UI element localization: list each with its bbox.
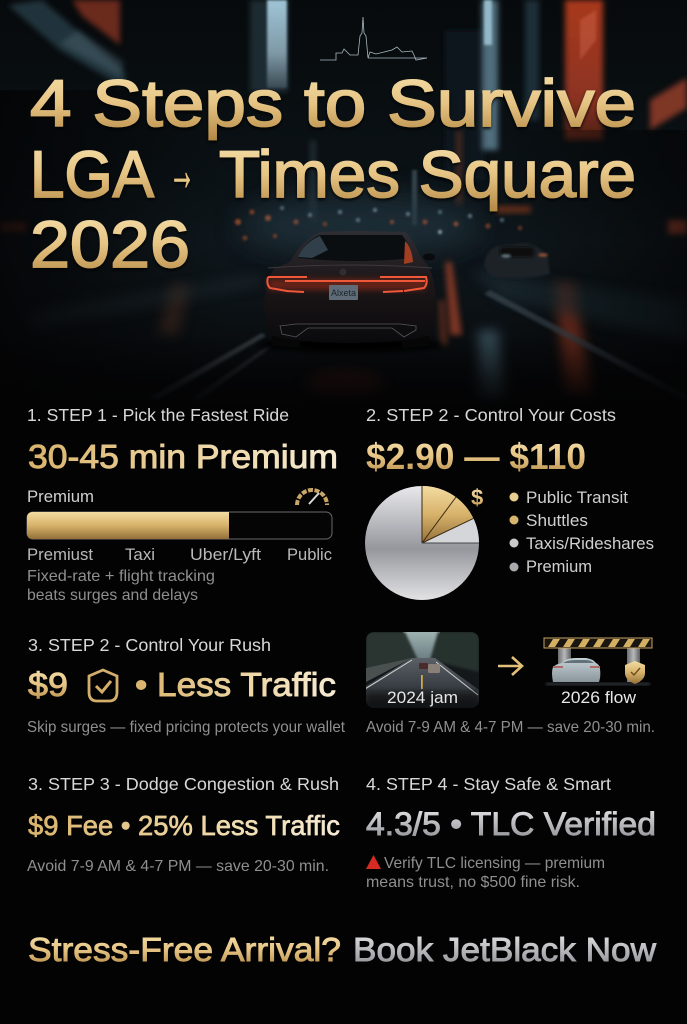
- bar axis labels: Public: [287, 546, 332, 564]
- panel: step 2 control your costs: [365, 405, 654, 600]
- icon: dollar sign: $: [471, 485, 483, 510]
- legend: [510, 488, 654, 576]
- panel: step 3 dodge congestion: [27, 774, 340, 875]
- arrow: [498, 657, 522, 675]
- distant city lights: [235, 206, 522, 240]
- legend: Public Transit: [526, 488, 628, 507]
- legend: Taxis/Rideshares: [526, 534, 654, 553]
- panel: traffic before and after: [365, 632, 655, 736]
- heading: 4. STEP 4 - Stay Safe & Smart: [366, 774, 611, 794]
- icon: warning triangle: [366, 855, 381, 869]
- heading: 3. STEP 2 - Control Your Rush: [28, 635, 271, 655]
- bar label: Premium: [27, 488, 94, 506]
- stat: price: $9: [28, 666, 68, 703]
- description: [366, 855, 605, 891]
- title: 4 Steps to Survive: [30, 66, 636, 140]
- bar axis labels: Premiust: [27, 546, 93, 564]
- icon: skyline line drawing: [320, 17, 427, 60]
- title: 2026: [30, 207, 190, 281]
- icon: speedometer gauge: [297, 490, 327, 505]
- bar axis labels: Uber/Lyft: [190, 546, 261, 564]
- car: main black sedan: [258, 231, 442, 353]
- description: Avoid 7-9 AM & 4-7 PM — save 20-30 min.: [27, 858, 329, 875]
- bottom fade: [148, 342, 687, 408]
- heading: 3. STEP 3 - Dodge Congestion & Rush: [28, 774, 339, 794]
- image: 2026 flow barrier: [544, 638, 652, 685]
- road reflections: [30, 262, 687, 402]
- image: 2024 jam: [365, 632, 479, 708]
- progress bar: [27, 512, 332, 539]
- call to action: Stress-Free Arrival?: [28, 931, 341, 968]
- stat: 4.3/5 • TLC Verified: [366, 806, 656, 842]
- description: beats surges and delays: [27, 587, 198, 604]
- car: main black sedan: Alxeta: [331, 288, 356, 298]
- side vignette: [0, 90, 687, 412]
- icon: shield check: [89, 670, 117, 701]
- stat: 30-45 min Premium: [28, 438, 338, 475]
- hero image: night city street with car: [0, 0, 687, 412]
- car: distant vehicle: [484, 243, 550, 279]
- pie chart: [365, 486, 479, 600]
- label: 2024 jam: 2024 jam: [387, 688, 458, 707]
- legend: Premium: [526, 557, 592, 576]
- title: [30, 66, 636, 281]
- panel: step 1 pick the fastest ride: [27, 405, 338, 604]
- call to action: Book JetBlack Now: [353, 931, 656, 968]
- label: 2026 flow: 2026 flow: [561, 688, 637, 707]
- bar axis labels: [27, 546, 332, 564]
- description: Verify TLC licensing — premium: [384, 855, 605, 872]
- panel: step 4 stay safe and smart: [366, 774, 656, 891]
- description: Avoid 7-9 AM & 4-7 PM — save 20-30 min.: [366, 719, 655, 736]
- legend: Shuttles: [526, 511, 588, 530]
- title: →: [169, 136, 195, 203]
- description: means trust, no $500 fine risk.: [366, 874, 580, 891]
- title: Times Square: [219, 137, 636, 211]
- panel: step 2 control your rush: [27, 635, 346, 736]
- heading: 1. STEP 1 - Pick the Fastest Ride: [27, 405, 289, 425]
- heading: 2. STEP 2 - Control Your Costs: [366, 405, 616, 425]
- stat: less traffic: • Less Traffic: [135, 666, 336, 703]
- description: [27, 568, 215, 604]
- description: Fixed-rate + flight tracking: [27, 568, 215, 585]
- description: Skip surges — fixed pricing protects your wallet: [27, 719, 346, 736]
- stat: $9 Fee • 25% Less Traffic: [28, 810, 340, 841]
- call to action: [28, 931, 656, 968]
- bar axis labels: Taxi: [125, 546, 155, 564]
- title: LGA: [30, 137, 154, 211]
- stat: $2.90 — $110: [366, 436, 586, 477]
- city neon blurred buildings: [0, 0, 687, 255]
